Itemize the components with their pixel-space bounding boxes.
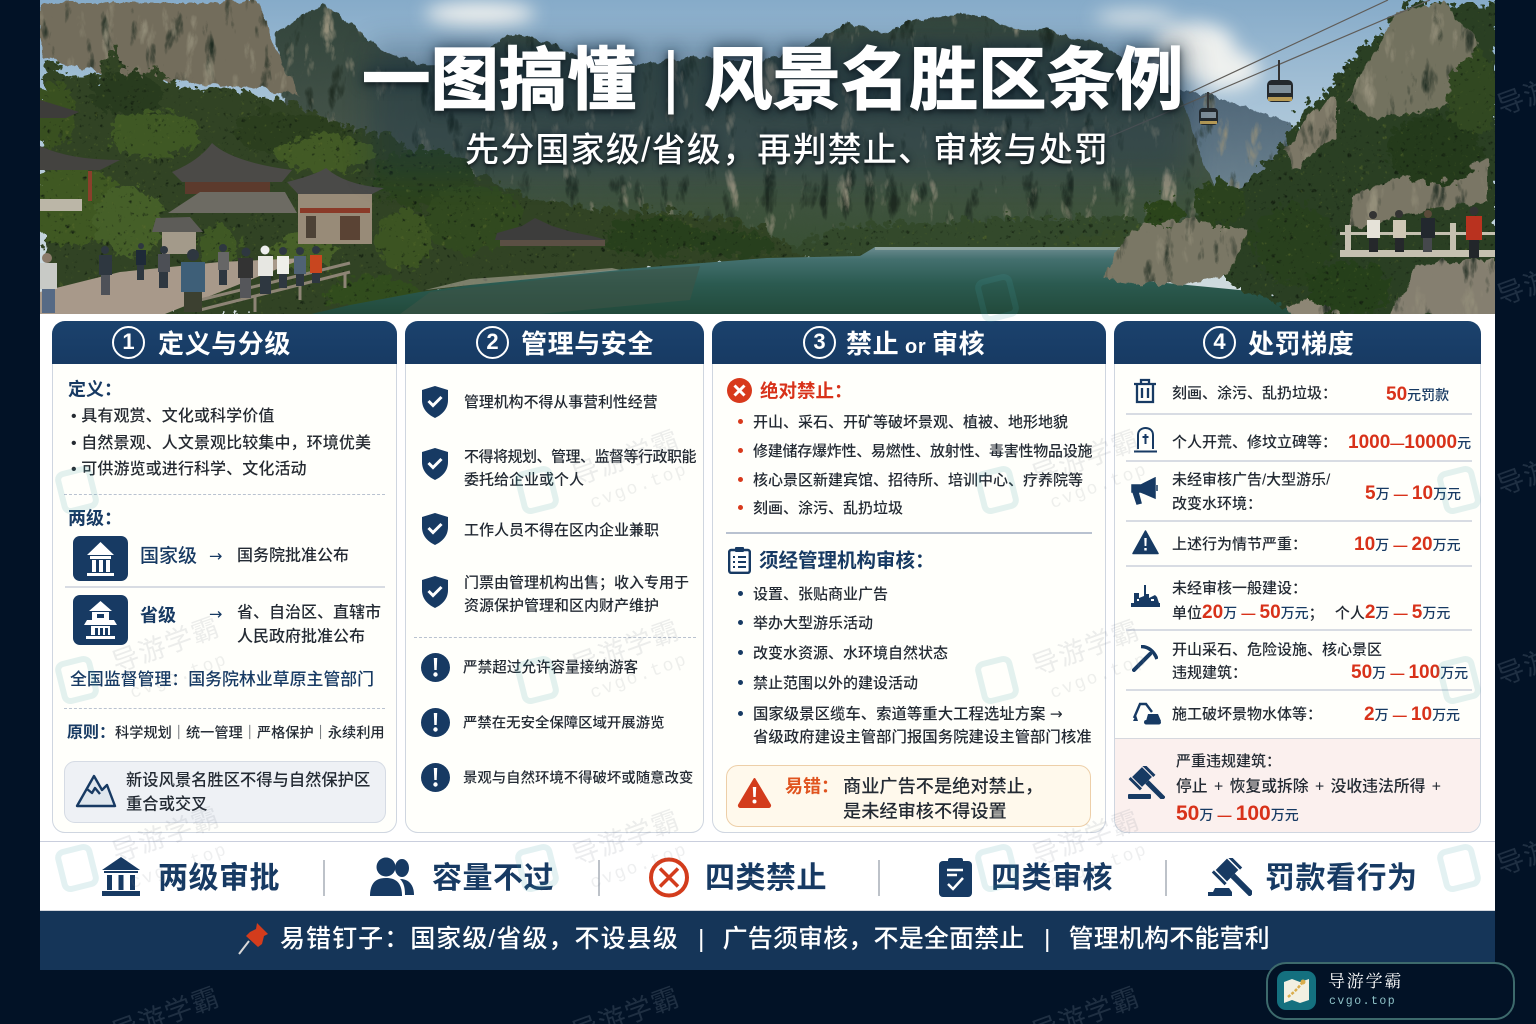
national arrow: → [209, 546, 222, 566]
cable cars [1199, 60, 1293, 125]
panel 4 header: 处罚梯度 [1248, 329, 1354, 359]
panel 4: penalty ladder [1114, 321, 1481, 833]
panel 1 header [52, 321, 397, 364]
prohibited heading: 绝对禁止： [760, 380, 853, 401]
review bullets: 国家级景区缆车、索道等重大工程选址方案 → [753, 705, 1063, 723]
mistake label: 易错： [785, 776, 839, 796]
rule text: 严禁在无安全保障区域开展游览 [463, 715, 664, 731]
brand url: cvgo.top [1329, 995, 1396, 1008]
watermarks: 导游学霸 [108, 612, 224, 678]
icon: clipboard [728, 547, 751, 574]
watermarks: 导游学霸 [108, 802, 224, 868]
icon: red cross [727, 378, 752, 403]
penalty row 3: 未经审核广告/大型游乐/ [1172, 472, 1330, 488]
title [360, 36, 1192, 121]
icon: gavel [1207, 858, 1252, 896]
left rock wall [40, 0, 297, 93]
lake [311, 247, 1330, 314]
watermarks: 导游学霸 [1028, 615, 1144, 681]
watermarks: 导游学霸 [568, 425, 684, 491]
right cliffs [1150, 0, 1495, 314]
prohibited bullets [738, 414, 1092, 517]
review bullets [738, 586, 1092, 746]
rule text [464, 574, 689, 614]
note text [126, 771, 370, 814]
penalty row 1: 刻画、涂污、乱扔垃圾： [1172, 385, 1337, 402]
overlook platform [1340, 206, 1495, 258]
prohibited bullets: 核心景区新建宾馆、招待所、培训中心、疗养院等 [753, 472, 1083, 489]
icon: red cross circle [648, 857, 690, 898]
review bullets: 设置、张贴商业广告 [753, 586, 888, 603]
watermarks: cvgo.top [1048, 840, 1151, 894]
icon: shield [422, 576, 448, 608]
prohibited bullets: 刻画、涂污、乱扔垃圾 [753, 500, 903, 517]
central range [273, 2, 1240, 252]
amount: 50万 — 100万元 [1351, 662, 1468, 683]
icon: exclamation [421, 653, 450, 682]
penalty row 7: 施工破坏景物水体等： [1172, 706, 1322, 723]
penalty row 5: 未经审核一般建设： [1172, 580, 1307, 597]
mistake text [843, 776, 1043, 822]
icon: shield [422, 448, 448, 480]
provincial approval: 省、自治区、直辖市 [237, 604, 381, 622]
penalty row 5 amounts: 单位20万 — 50万元； 个人2万 — 5万元 [1172, 602, 1450, 623]
summary: four prohibitions: 四类禁止 [705, 862, 827, 895]
icon: bank [101, 856, 141, 896]
icon: provincial building [73, 595, 128, 645]
penalty row 6: 违规建筑： [1172, 664, 1247, 682]
icon: push pin [238, 922, 269, 955]
watermarks: cvgo.top [128, 650, 231, 704]
amount: 50元罚款 [1386, 384, 1449, 405]
serious amount: 50万 — 100万元 [1176, 802, 1299, 825]
watermarks: 导游学霸 [568, 615, 684, 681]
icon: national building [73, 536, 128, 581]
subtitle: 先分国家级/省级，再判禁止、审核与处罚 [465, 132, 1109, 170]
icon: people [370, 857, 414, 896]
icon: megaphone [1131, 477, 1158, 505]
rule text: 景观与自然环境不得破坏或随意改变 [463, 770, 693, 786]
watermarks: cvgo.top [1048, 650, 1151, 704]
supervision: 全国监督管理：国务院林业草原主管部门 [70, 670, 374, 689]
icon: mountains [76, 774, 116, 808]
panel 3 header: 3 [813, 329, 826, 354]
summary: capacity: 容量不过 [432, 862, 554, 895]
watermarks: 导游学霸 [1028, 425, 1144, 491]
serious title: 严重违规建筑： [1176, 753, 1281, 770]
panel 1: definition and grades [52, 321, 397, 833]
provincial arrow: → [209, 604, 222, 624]
icon: exclamation [421, 708, 450, 737]
review bullets: 禁止范围以外的建设活动 [753, 675, 918, 692]
definition bullets [71, 407, 371, 478]
panel 3: prohibition or review [712, 321, 1106, 833]
amount: 2万 — 10万元 [1364, 704, 1460, 725]
prohibited bullets: 开山、采石、开矿等破坏景观、植被、地形地貌 [753, 414, 1068, 431]
panel 2 header: 管理与安全 [521, 329, 654, 359]
mistake text: 商业广告不是绝对禁止， [843, 776, 1043, 796]
definition bullets: • 具有观赏、文化或科学价值 [71, 408, 274, 425]
rule text: 委托给企业或个人 [464, 472, 584, 488]
note text: 重合或交叉 [126, 796, 207, 814]
panel 4 header [1114, 321, 1481, 364]
watermarks: cvgo.top [1048, 460, 1151, 514]
banner text: 易错钉子：国家级/省级，不设县级 [280, 925, 679, 953]
definition bullets: • 自然景观、人文景观比较集中，环境优美 [71, 434, 371, 451]
penalty row 2: 个人开荒、修坟立碑等： [1172, 434, 1337, 451]
amount: 5万 — 10万元 [1365, 483, 1461, 504]
provincial approval: 人民政府批准公布 [237, 628, 365, 646]
bottom banner [40, 911, 1495, 970]
review bullets: 举办大型游乐活动 [753, 615, 873, 632]
watermarks: cvgo.top [588, 460, 691, 514]
serious violations block [1115, 738, 1480, 832]
watermarks: cvgo.top [588, 650, 691, 704]
national grade: 国家级 [140, 546, 197, 567]
definition heading: 定义： [68, 380, 122, 400]
provincial grade: 省级 [140, 606, 176, 626]
principles: 原则：科学规划｜统一管理｜严格保护｜永续利用 [67, 724, 385, 742]
title: 一图搞懂 [362, 42, 636, 119]
summary strip [40, 841, 1495, 911]
icon: shield [422, 386, 448, 418]
panel 1 header: 定义与分级 [158, 329, 291, 359]
rule text: 资源保护管理和区内财产维护 [464, 598, 659, 614]
callout: common mistake [726, 765, 1091, 827]
icon: exclamation [421, 763, 450, 792]
rule text: 门票由管理机构出售；收入专用于 [464, 574, 689, 592]
brand name: 导游学霸 [1328, 972, 1403, 991]
review heading: 须经管理机构审核： [759, 550, 935, 572]
temples [40, 100, 607, 254]
prohibited bullets: 修建储存爆炸性、易燃性、放射性、毒害性物品设施 [753, 443, 1092, 460]
banner text: | 管理机构不能营利 [1044, 925, 1270, 953]
grades heading: 两级： [68, 508, 122, 528]
icon: warning [1132, 530, 1159, 554]
watermarks: cvgo.top [128, 840, 231, 894]
icon: gavel [1127, 766, 1165, 799]
icon: map logo [1277, 971, 1316, 1010]
national approval: 国务院批准公布 [237, 548, 349, 564]
title: | [662, 38, 680, 115]
penalty row 6: 开山采石、危险设施、核心景区 [1172, 642, 1382, 658]
icon: tombstone [1134, 427, 1157, 452]
hero scenery illustration [40, 0, 1495, 314]
summary: penalties by behavior: 罚款看行为 [1265, 862, 1418, 895]
icon: excavator [1132, 702, 1161, 724]
visitors on path [40, 243, 322, 313]
review bullets: 改变水资源、水环境自然状态 [753, 645, 948, 662]
rule text: 不得将规划、管理、监督等行政职能 [464, 448, 696, 466]
mistake text: 是未经审核不得设置 [843, 802, 1007, 822]
panel 2 header: 2 [486, 329, 499, 354]
icon: buildings [1131, 585, 1160, 607]
watermarks: 导游学霸 [568, 805, 684, 871]
icon: pickaxe [1132, 645, 1158, 672]
panel 2: management and safety [405, 321, 704, 833]
summary: four reviews: 四类审核 [991, 862, 1113, 895]
amount: 10万 — 20万元 [1354, 534, 1461, 555]
icon: review clipboard [939, 858, 972, 897]
panel 3 header: 禁止 or 审核 [846, 329, 985, 359]
panel 3 header [712, 321, 1106, 364]
icon: warning triangle [738, 778, 772, 808]
icon: shield [422, 513, 448, 545]
rule text: 管理机构不得从事营利性经营 [464, 395, 658, 411]
brand badge [1266, 962, 1515, 1020]
panel 2 header [405, 321, 704, 364]
panel 1 header: 1 [122, 329, 135, 354]
provincial approval [237, 604, 381, 646]
penalty row 4: 上述行为情节严重： [1172, 536, 1307, 553]
amount: 1000—10000元 [1348, 432, 1471, 453]
title: 风景名胜区条例 [704, 42, 1184, 119]
penalty row 3 [1172, 472, 1330, 512]
panel 4 header: 4 [1213, 329, 1226, 354]
penalty row 6 [1172, 642, 1382, 682]
note text: 新设风景名胜区不得与自然保护区 [126, 772, 370, 790]
serious actions: 停止 + 恢复或拆除 + 没收违法所得 + [1176, 779, 1441, 796]
banner text: | 广告须审核，不是全面禁止 [698, 925, 1024, 953]
note box [64, 761, 386, 823]
review bullets: 省级政府建设主管部门报国务院建设主管部门核准 [753, 729, 1092, 746]
forest slope [22, 40, 805, 314]
summary: two-level approval: 两级审批 [158, 862, 280, 895]
watermarks: 导游学霸 [1028, 805, 1144, 871]
rule text: 工作人员不得在区内企业兼职 [464, 522, 659, 539]
icon: trash [1134, 378, 1156, 404]
definition bullets: • 可供游览或进行科学、文化活动 [71, 461, 307, 478]
penalty row 3: 改变水环境： [1172, 496, 1262, 512]
rule text [464, 448, 696, 488]
rule text: 严禁超过允许容量接纳游客 [463, 660, 638, 676]
watermarks: cvgo.top [588, 840, 691, 894]
